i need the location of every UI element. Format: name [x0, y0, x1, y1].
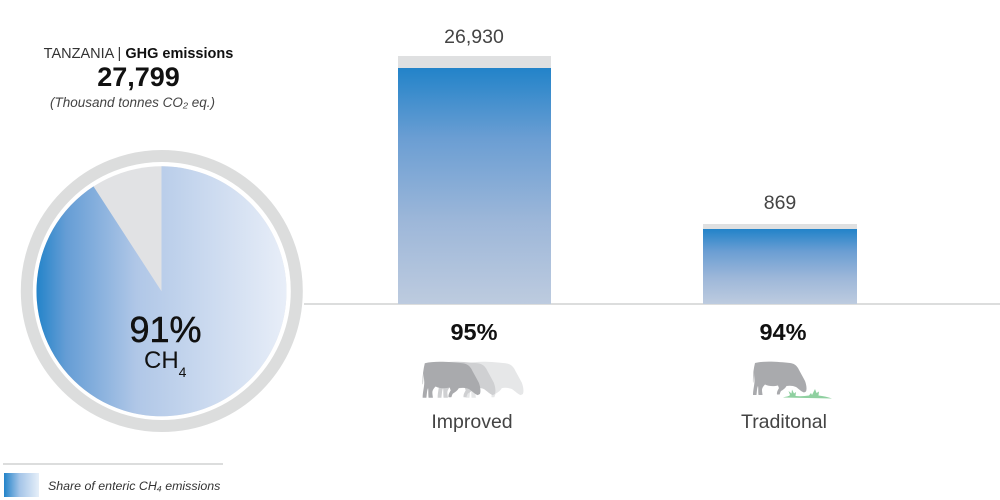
bar: traditional — [703, 192, 857, 304]
unit note: (Thousand tonnes CO₂ eq.) — [50, 95, 215, 110]
pie label: CH — [144, 347, 179, 374]
value: 26,930 — [444, 26, 504, 48]
title block — [44, 46, 233, 110]
total emissions number: 27,799 — [97, 62, 180, 92]
baseline — [304, 303, 1000, 305]
heading: TANZANIA | GHG emissions — [44, 46, 233, 62]
traditional share: 94% — [759, 319, 807, 345]
value: 869 — [764, 192, 796, 214]
legend text: Share of enteric CH₄ emissions — [48, 479, 220, 493]
improved share: 95% — [450, 319, 498, 345]
label: improved: Improved — [431, 411, 513, 433]
icon: three cows — [423, 362, 523, 398]
legend swatch — [4, 473, 39, 497]
legend — [3, 463, 223, 497]
label: traditional: Traditonal — [741, 411, 827, 433]
pie label: 4 — [179, 364, 187, 380]
icon: cow grazing — [753, 362, 832, 398]
bar: improved — [398, 26, 551, 304]
pie value: 91% — [129, 309, 202, 350]
pie chart: CH4 share — [27, 156, 297, 426]
